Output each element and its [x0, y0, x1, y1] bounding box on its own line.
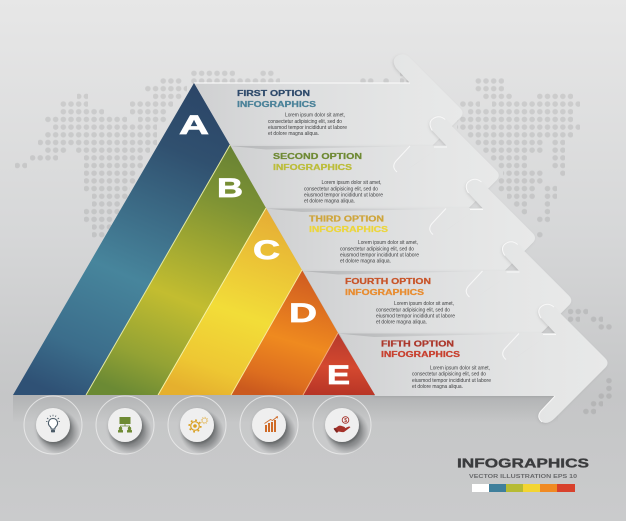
arrow: fifth option [339, 304, 608, 423]
bottom-right title [457, 456, 589, 492]
text block: fourth option: Lorem ipsum dolor sit amet, [394, 301, 454, 307]
text block: third option: consectetur adipisicing elit, sed do [340, 246, 414, 252]
text block: fifth option: INFOGRAPHICS [381, 350, 460, 359]
text block: second option [273, 152, 383, 205]
arrow: first option [194, 54, 462, 173]
text block: first option [237, 89, 347, 137]
text block: second option: eiusmod tempor incididunt ut labore [304, 192, 383, 198]
icon: hand with coin: $ [344, 418, 347, 424]
text block: second option: INFOGRAPHICS [273, 163, 352, 172]
text block: first option: INFOGRAPHICS [237, 100, 316, 109]
icon button: org chart [96, 396, 154, 454]
text block: second option: Lorem ipsum dolor sit amet, [322, 180, 382, 186]
text block: fourth option: FOURTH OPTION [345, 277, 431, 286]
text block: fifth option [381, 340, 491, 390]
icon button: gears [168, 396, 226, 454]
text block: fourth option: INFOGRAPHICS [345, 288, 424, 297]
text block: fifth option: eiusmod tempor incididunt ut labore [412, 378, 491, 384]
first arrow top highlight [194, 82, 410, 84]
text block: fourth option: consectetur adipisicing elit, sed do [376, 307, 450, 313]
text block: fifth option: et dolore magna aliqua. [412, 384, 463, 390]
arrow fold shading [230, 117, 556, 422]
text block: first option: FIRST OPTION [237, 89, 310, 98]
text block: fifth option: consectetur adipisicing elit, sed do [412, 372, 486, 378]
text block: fourth option: et dolore magna aliqua. [376, 320, 427, 326]
text block: fifth option: Lorem ipsum dolor sit amet, [430, 365, 490, 371]
text block: third option: Lorem ipsum dolor sit amet, [358, 240, 418, 246]
text block: first option: et dolore magna aliqua. [268, 131, 319, 137]
letter D: D [289, 298, 317, 328]
arrow: fourth option [303, 242, 571, 360]
text block: third option: INFOGRAPHICS [309, 225, 388, 234]
text block: third option [309, 214, 419, 265]
band C [158, 208, 302, 395]
arrow: third option [266, 179, 535, 298]
base shadow under pyramid and arrow [13, 395, 558, 423]
text block: third option: eiusmod tempor incididunt ut labore [340, 252, 419, 258]
text block: second option: et dolore magna aliqua. [304, 199, 355, 205]
text block: fifth option: FIFTH OPTION [381, 340, 454, 348]
dotted world map [15, 69, 612, 415]
text block: second option: SECOND OPTION [273, 152, 362, 161]
text block: third option: THIRD OPTION [309, 214, 384, 224]
text block: fourth option: eiusmod tempor incididunt ut labore [376, 314, 455, 320]
letter A: A [179, 110, 209, 140]
letter B: B [217, 173, 243, 203]
letter C: C [253, 235, 280, 265]
bottom-right title: INFOGRAPHICS [457, 456, 589, 471]
text block: first option: Lorem ipsum dolor sit amet, [285, 112, 345, 118]
text block: third option: et dolore magna aliqua. [340, 259, 391, 265]
text block: first option: consectetur adipisicing elit, sed do [268, 119, 342, 125]
text block: first option: eiusmod tempor incididunt ut labore [268, 125, 347, 131]
text block: second option: consectetur adipisicing elit, sed do [304, 186, 378, 192]
icon button: bar chart [240, 396, 298, 454]
band B [86, 145, 266, 395]
band A [13, 83, 230, 395]
icon button: lightbulb [24, 396, 82, 454]
colour legend bar [472, 484, 575, 492]
pyramid [13, 83, 375, 395]
icon button: hand with coin [313, 396, 371, 454]
icon: gears [189, 417, 208, 432]
icon: bar chart [264, 416, 278, 432]
subtitle: VECTOR ILLUSTRATION EPS 10 [469, 474, 577, 480]
arrow: second option [230, 117, 499, 235]
icon: lightbulb [46, 415, 60, 432]
letter E: E [327, 360, 350, 390]
text block: fourth option [345, 277, 455, 326]
band D [231, 270, 338, 395]
band E [303, 333, 375, 395]
icon: org chart [118, 417, 132, 432]
